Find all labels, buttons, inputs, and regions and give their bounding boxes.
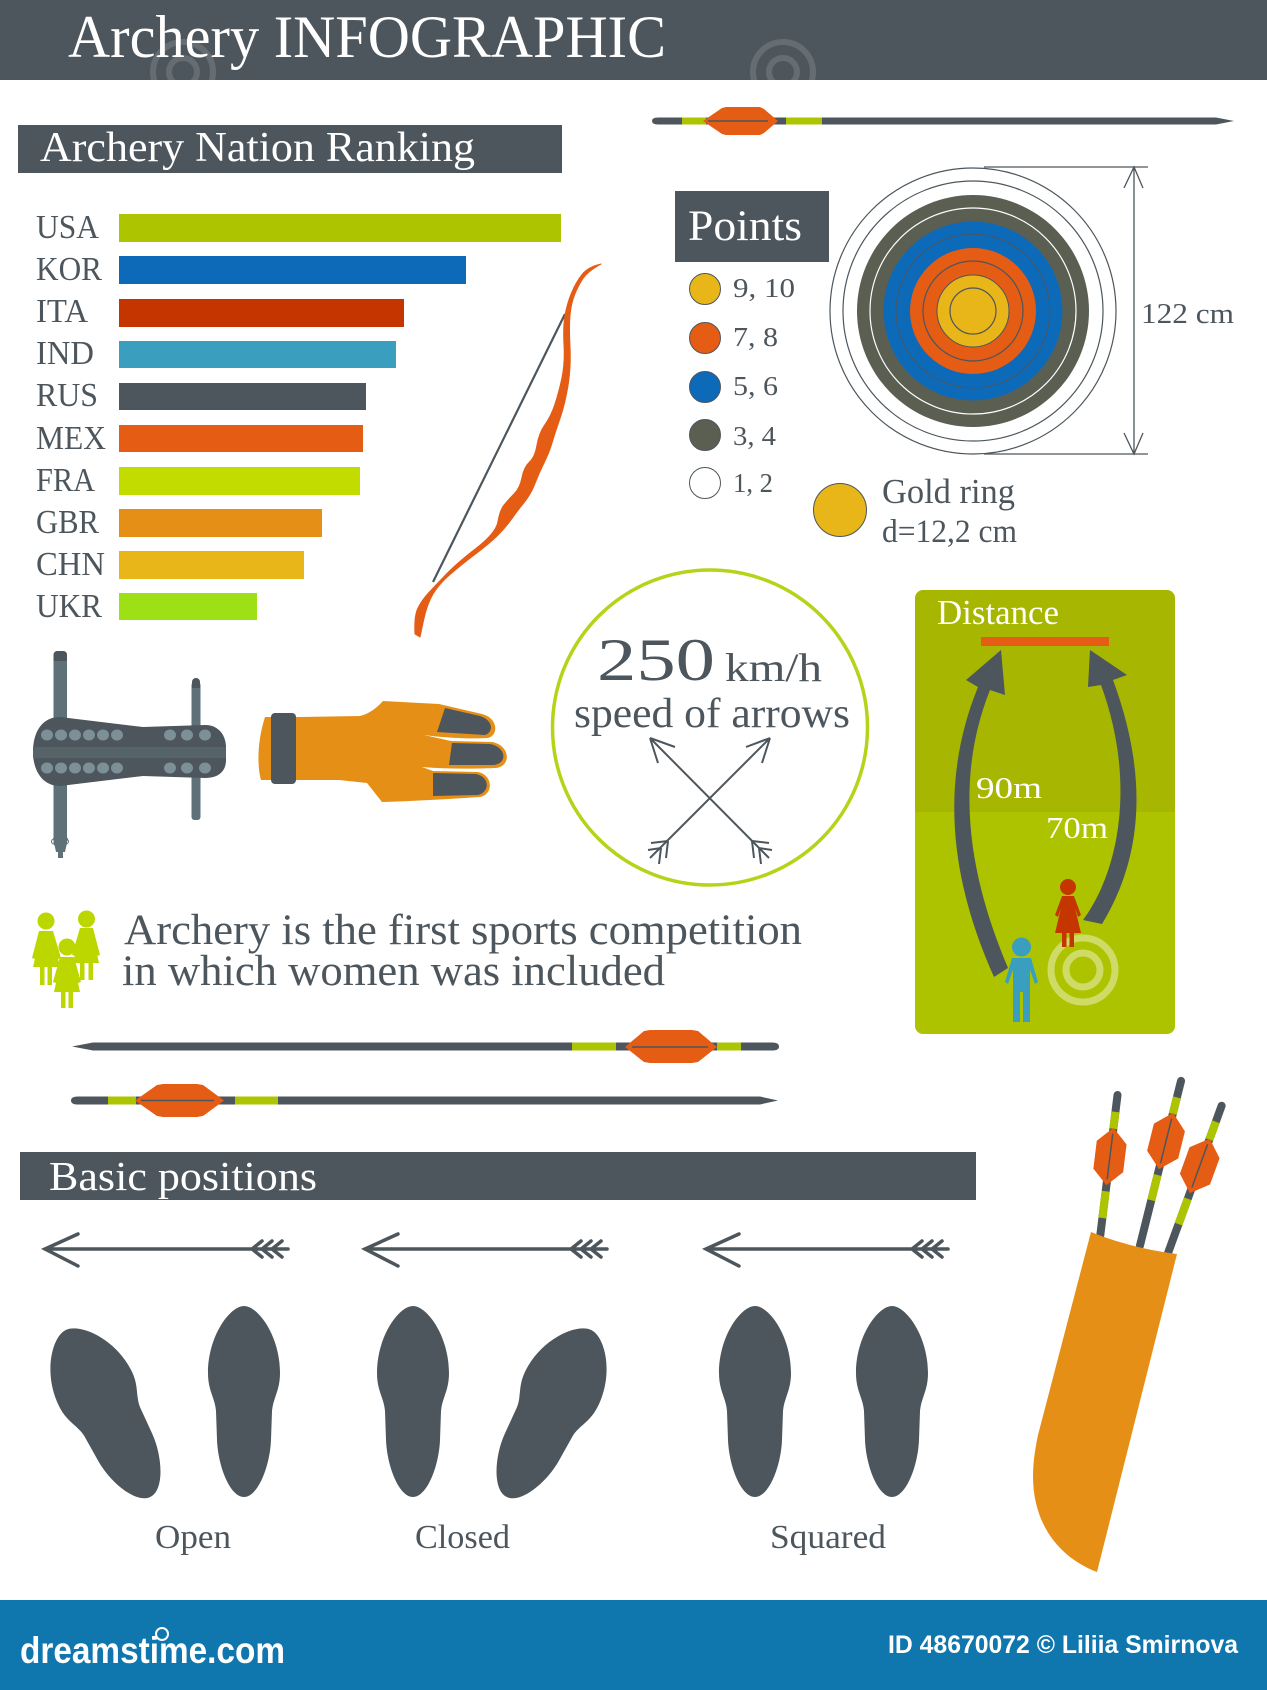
heading: basic positions: Basic positions <box>49 1153 317 1199</box>
text block: women fact <box>122 907 802 995</box>
icon: middle arrow pointing left <box>72 1030 779 1063</box>
bar chart: nation ranking: ITA <box>36 293 88 330</box>
gold ring note: Gold ring <box>882 472 1015 511</box>
panel: points heading: Points <box>688 203 802 250</box>
labels: stance names: Closed <box>415 1519 510 1556</box>
legend: points colours: 1, 2 <box>733 468 773 498</box>
icon: top arrow <box>652 107 1234 135</box>
bar chart: nation ranking: USA <box>36 209 99 246</box>
text block: women fact: Archery is the first sports competition <box>124 907 802 954</box>
diagram: closed stance feet <box>377 1306 627 1515</box>
text block: women fact: in which women was included <box>122 948 665 995</box>
title banner <box>0 0 1267 102</box>
heading: basic positions <box>20 1152 976 1200</box>
panel: distance: 70m <box>1046 810 1108 845</box>
title banner: Archery INFOGRAPHIC <box>68 4 666 70</box>
legend: points colours: 5, 6 <box>733 371 778 401</box>
icon: three women <box>32 910 100 1008</box>
footer bar: ID 48670072 © Liliia Smirnova <box>888 1631 1239 1659</box>
gold ring note <box>814 472 1017 550</box>
labels: stance names <box>155 1519 886 1556</box>
bar chart: nation ranking: MEX <box>36 420 106 457</box>
gold ring note: d=12,2 cm <box>882 514 1017 550</box>
dimension: 122 cm <box>984 167 1234 454</box>
heading: nation ranking: Archery Nation Ranking <box>40 125 475 171</box>
arrows: shooting direction <box>45 1234 948 1266</box>
icon: quiver with arrows <box>1033 1073 1238 1572</box>
bar chart: nation ranking: GBR <box>36 504 99 541</box>
bar chart: nation ranking: UKR <box>36 588 102 625</box>
bar chart: nation ranking: RUS <box>36 377 98 414</box>
footer bar: dreamstime.com <box>20 1630 285 1671</box>
icon: bow <box>415 264 601 637</box>
callout: speed of arrows: speed of arrows <box>574 691 850 737</box>
bar chart: nation ranking: KOR <box>36 251 102 288</box>
panel: points heading <box>675 191 829 262</box>
legend: points colours <box>690 273 795 498</box>
callout: speed of arrows: 250 <box>597 627 715 693</box>
bar chart: nation ranking: FRA <box>36 462 95 499</box>
bar chart: nation ranking: CHN <box>36 546 105 583</box>
legend: points colours: 9, 10 <box>733 273 795 303</box>
bar chart: nation ranking <box>36 209 561 625</box>
panel: distance: 90m <box>976 770 1042 805</box>
target face <box>830 168 1116 454</box>
diagram: open stance feet <box>30 1306 280 1515</box>
icon: arm guard <box>33 651 226 858</box>
diagram: squared stance feet <box>719 1306 928 1497</box>
icon: shooting glove <box>258 701 507 802</box>
bar chart: nation ranking: IND <box>36 335 94 372</box>
footer bar <box>0 1600 1267 1690</box>
labels: stance names: Open <box>155 1519 231 1556</box>
panel: distance <box>915 590 1175 1034</box>
legend: points colours: 3, 4 <box>733 421 777 451</box>
labels: stance names: Squared <box>770 1519 886 1556</box>
icon: lower arrow pointing right <box>71 1084 778 1117</box>
legend: points colours: 7, 8 <box>733 322 778 352</box>
dimension: 122 cm: 122 cm <box>1141 298 1234 330</box>
callout: speed of arrows <box>552 570 868 885</box>
panel: distance: Distance <box>937 593 1059 632</box>
callout: speed of arrows: km/h <box>725 645 822 690</box>
